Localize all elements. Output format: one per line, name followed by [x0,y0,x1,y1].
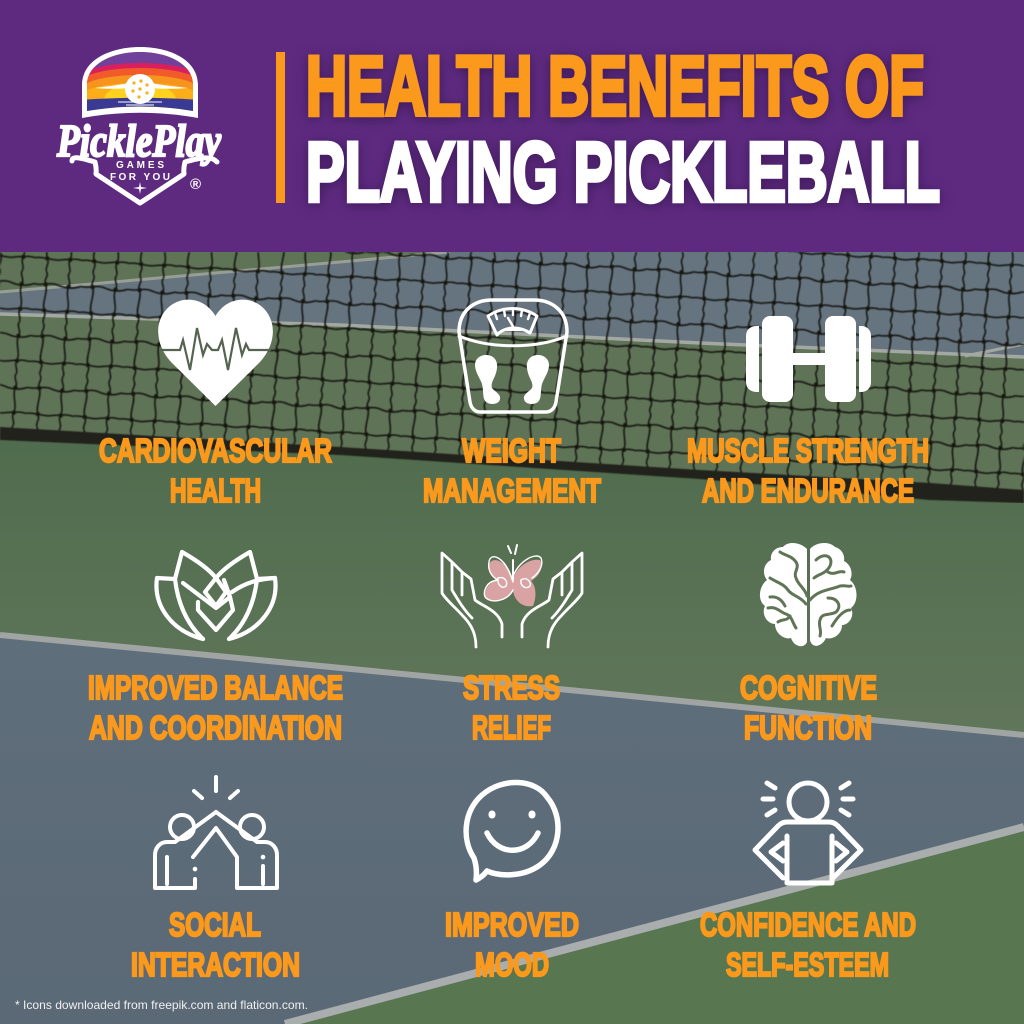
label [700,906,916,983]
panel: cognitive function [740,543,877,746]
icon: confident person [755,783,861,883]
label: WEIGHT [462,432,561,469]
icon: heart with pulse [158,300,273,406]
label: INTERACTION [131,946,300,983]
title [306,39,940,219]
label [740,669,877,746]
logo: FOR YOU [110,172,170,183]
label [88,669,343,746]
label [445,906,579,983]
label: SELF-ESTEEM [726,946,889,983]
label [99,432,332,509]
logo: PicklePlay [56,115,221,166]
label: COGNITIVE [740,669,877,706]
icon: brain [760,543,857,646]
label [687,432,929,509]
label: AND COORDINATION [89,709,342,746]
label [423,432,601,509]
panel: improved mood [445,782,579,983]
panel: cardiovascular health [99,300,332,509]
label: CONFIDENCE AND [700,906,916,943]
logo [56,47,221,203]
panel: social interaction [131,777,300,983]
label [131,906,300,983]
icon: hands with butterfly [442,545,582,647]
panel: confidence and self-esteem [700,783,916,983]
panel: improved balance and coordination [88,552,343,746]
icon: smile speech bubble [466,782,558,880]
label: HEALTH [170,472,261,509]
label: AND ENDURANCE [702,472,914,509]
logo: ® [190,176,201,193]
icon: high five [155,777,277,888]
header band [0,0,1024,252]
tennis net [0,252,1024,503]
icon: bathroom scale [459,300,567,412]
logo: GAMES [116,160,164,171]
court background [0,252,1024,1024]
footnote: * Icons downloaded from freepik.com and flaticon.com. [15,998,308,1012]
label: MOOD [475,946,549,983]
title divider bar [276,52,285,203]
icon: lotus [156,552,276,639]
icon: dumbbell [746,316,871,402]
label: SOCIAL [169,906,261,943]
label: MUSCLE STRENGTH [687,432,929,469]
label: CARDIOVASCULAR [99,432,332,469]
label: IMPROVED BALANCE [88,669,343,706]
label: MANAGEMENT [423,472,601,509]
panel: muscle strength and endurance [687,316,929,509]
label: RELIEF [472,709,551,746]
label [463,669,560,746]
label: STRESS [463,669,560,706]
label: IMPROVED [445,906,579,943]
panel: weight management [423,300,601,509]
label: FUNCTION [744,709,872,746]
panel: stress relief [442,545,582,746]
